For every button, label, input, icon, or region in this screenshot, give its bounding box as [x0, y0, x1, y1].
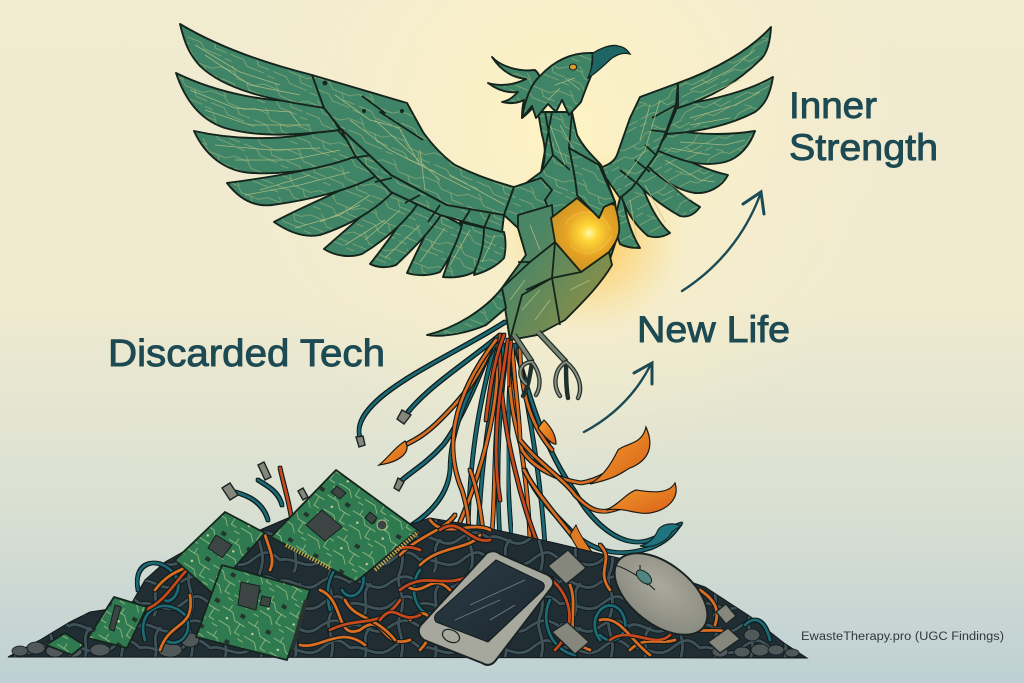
- chest plate: [569, 148, 615, 218]
- legs: [514, 332, 580, 398]
- circuit board: large: [271, 470, 418, 582]
- circuit board: left: [175, 512, 265, 593]
- watermark credit: EwasteTherapy.pro (UGC Findings): [801, 631, 1004, 643]
- neck and head: [488, 45, 630, 172]
- crest: [488, 57, 542, 118]
- icon: smartphone: [419, 551, 553, 665]
- phoenix glow: [497, 145, 687, 335]
- circuit board: front: [196, 565, 310, 660]
- rocks: [12, 629, 799, 657]
- tangled cables: [137, 561, 770, 655]
- left wing: [176, 24, 514, 277]
- chip: [306, 510, 342, 541]
- label: Inner Strength: [789, 85, 938, 168]
- circuit board: tiny: [46, 633, 84, 655]
- label: Inner Strength: Strength: [789, 127, 938, 168]
- label: Inner Strength: Inner: [789, 85, 877, 126]
- covert band: [340, 128, 504, 232]
- tail wedge: [427, 288, 506, 336]
- icon: upper right flame: [590, 427, 650, 484]
- arm: [599, 83, 678, 198]
- icon: USB connectors: [548, 550, 740, 654]
- neck plates: [541, 112, 599, 172]
- label: New Life: New Life: [637, 309, 790, 350]
- arrow: to Inner Strength: [682, 192, 764, 291]
- pile base: [8, 500, 807, 658]
- icon: teal cable tip: [640, 524, 681, 547]
- feathers: [616, 27, 773, 248]
- tail cables rising from the pile: [356, 322, 681, 570]
- right wing: [599, 27, 773, 248]
- torso: [502, 205, 612, 340]
- loose cables with plugs: [235, 480, 282, 520]
- circuit board: small: [88, 597, 147, 648]
- label: Discarded Tech: Discarded Tech: [108, 333, 385, 375]
- icon: cable connectors: [356, 410, 411, 491]
- eye: [569, 64, 577, 70]
- icon: loose plugs: [222, 462, 308, 500]
- arm: [312, 75, 514, 215]
- feathers: [176, 24, 506, 277]
- circuit traces: [190, 45, 505, 265]
- icon: orange leaf tip: [538, 420, 556, 444]
- head: [522, 53, 593, 118]
- icon: left flame leaf: [379, 441, 407, 465]
- beak: [588, 45, 630, 78]
- e-waste pile: [8, 462, 807, 665]
- glowing core: [551, 198, 619, 272]
- icon: big orange flame strand: [570, 525, 604, 570]
- body silhouette: [502, 112, 619, 340]
- icon: computer mouse: [600, 537, 722, 651]
- phoenix: [176, 24, 773, 398]
- core circuit rings: [565, 212, 612, 253]
- icon: lower right flame: [606, 483, 676, 513]
- arrow: to New Life: [584, 363, 652, 432]
- shoulder plate: [504, 178, 552, 228]
